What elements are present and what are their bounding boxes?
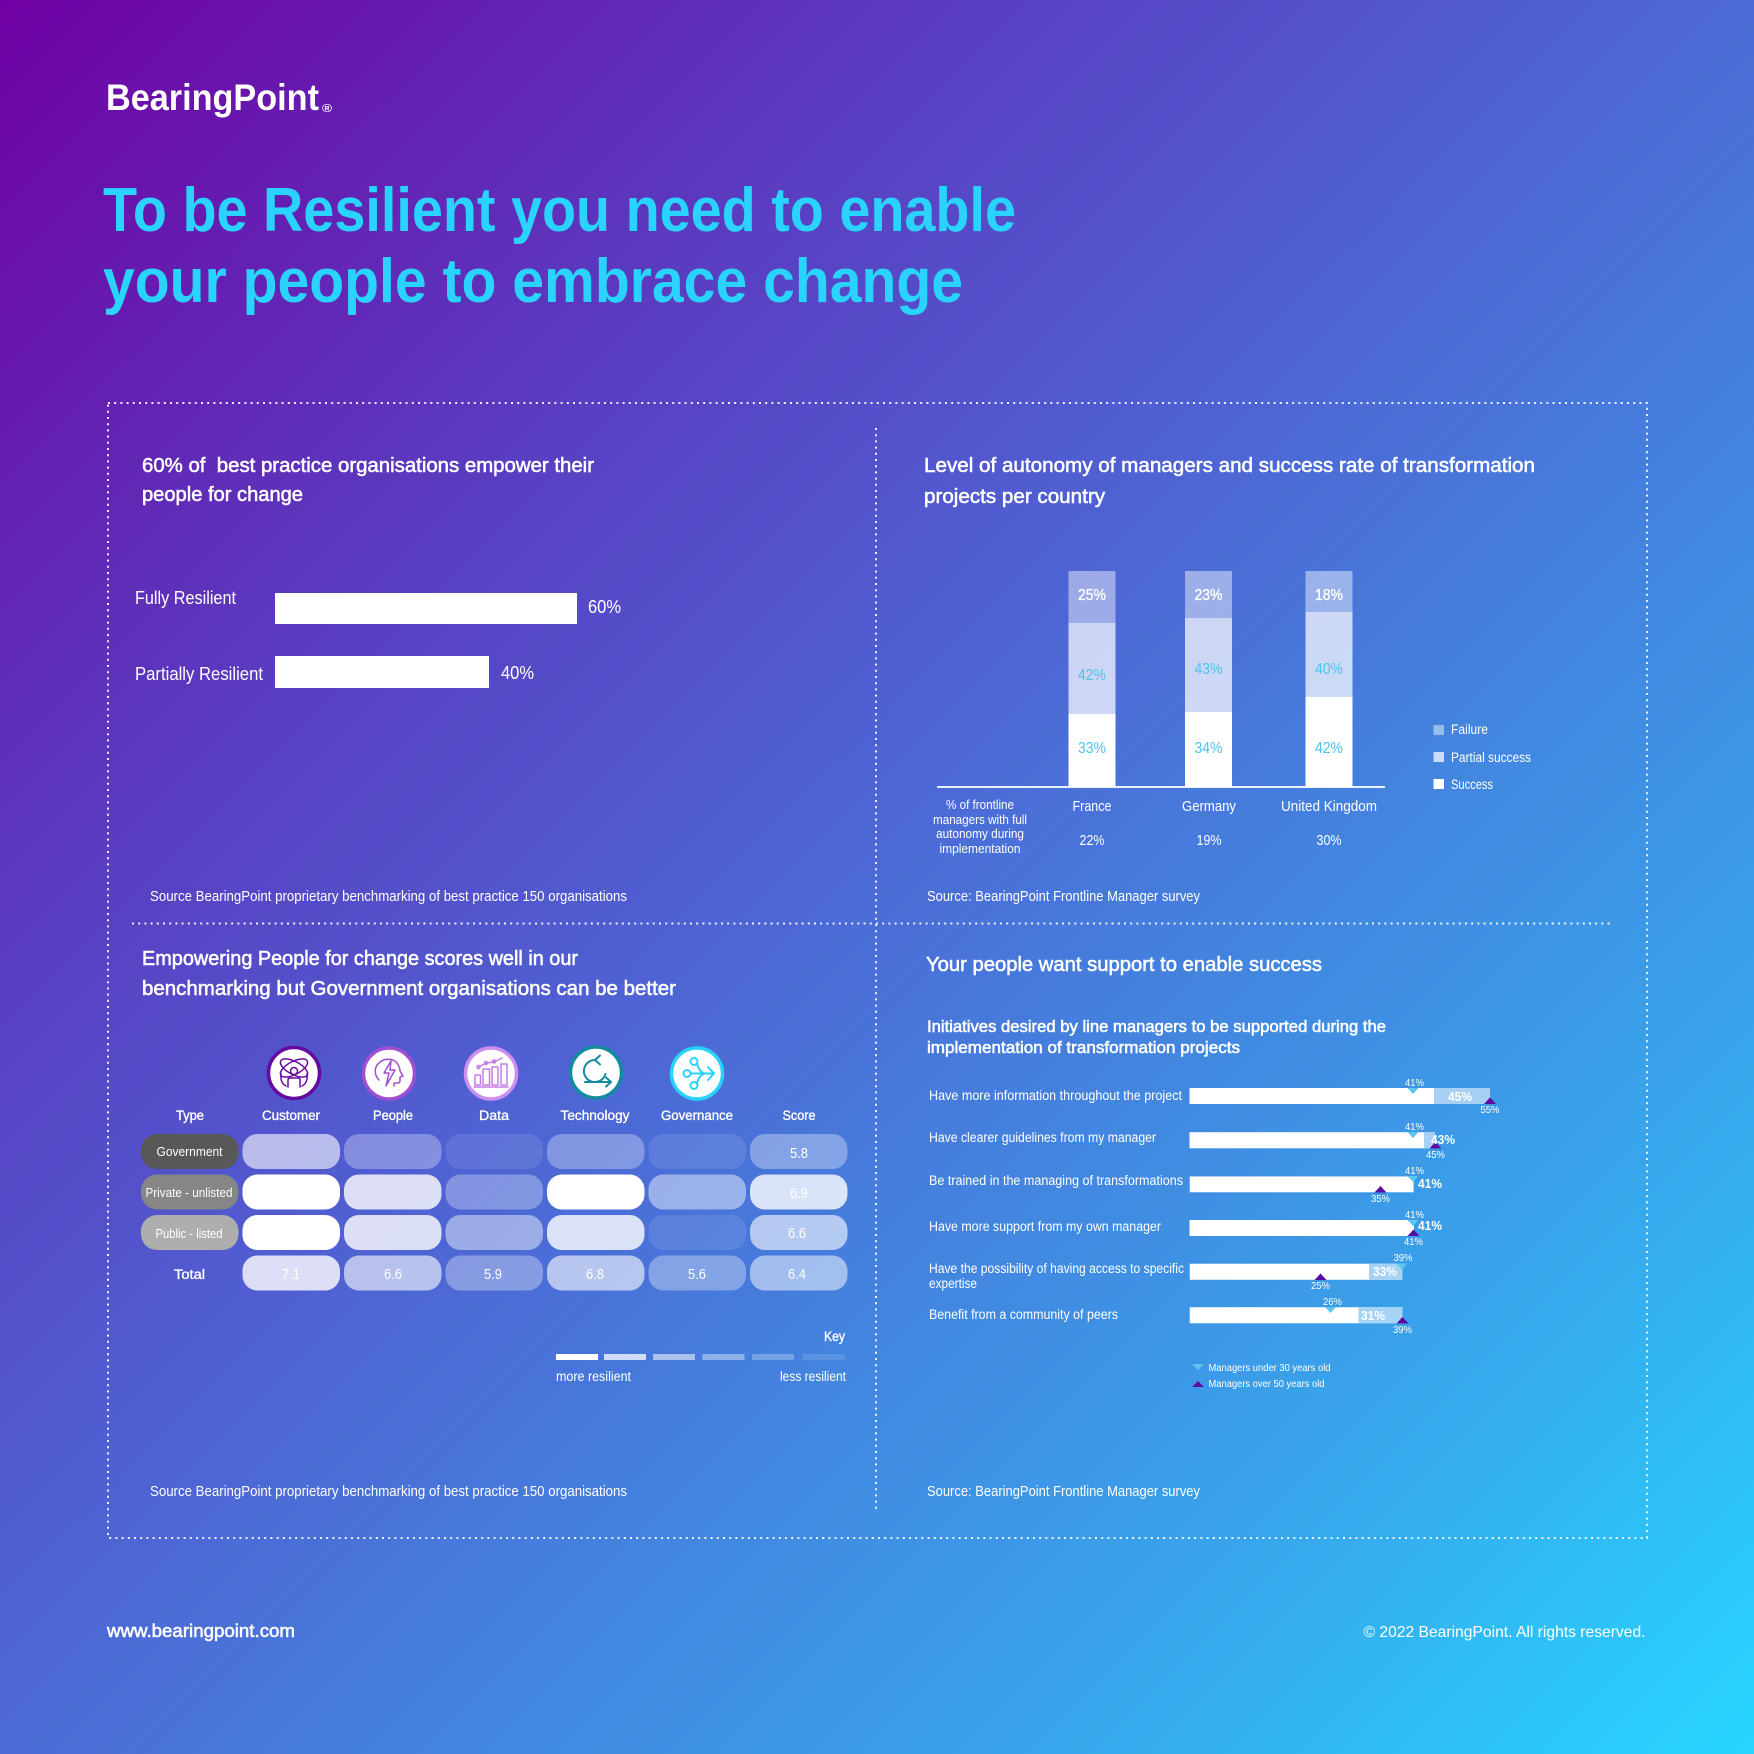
stacked bar chart <box>933 571 1385 856</box>
bar chart: initiatives: 55% <box>1480 1104 1500 1116</box>
legend: outcome <box>1434 722 1531 792</box>
bar chart: resilience: Fully Resilient <box>135 588 236 608</box>
heat table: 5.9 <box>484 1267 502 1283</box>
heat table <box>141 1134 848 1290</box>
bar chart: initiatives: Have clearer guidelines from my manager <box>929 1130 1156 1145</box>
heat table: 6.9 <box>790 1186 808 1202</box>
panel: autonomy and success rate <box>924 454 1535 905</box>
panel: benchmarking table <box>141 947 848 1500</box>
table header: Customer <box>262 1108 320 1123</box>
bar chart: initiatives: 39% <box>1394 1252 1412 1264</box>
heading <box>924 454 1535 508</box>
bar chart: initiatives: 41% <box>1405 1165 1424 1177</box>
logo: BearingPoint <box>106 77 319 118</box>
bar chart: initiatives <box>929 1077 1500 1336</box>
heat table: Public - listed <box>156 1227 223 1241</box>
bar chart: initiatives: 35% <box>1371 1193 1390 1205</box>
stacked bar chart: 30% <box>1316 833 1342 849</box>
stacked bar chart: 42% <box>1315 740 1343 757</box>
heat table: 6.6 <box>384 1267 402 1283</box>
icon: people <box>364 1048 414 1099</box>
table header: Type <box>176 1108 204 1123</box>
panel: best practice organisations <box>135 454 627 905</box>
table header: Governance <box>661 1108 733 1123</box>
bar chart: initiatives: 45% <box>1426 1149 1445 1161</box>
heat table: 6.8 <box>586 1267 604 1283</box>
bar chart: initiatives: Have more support from my own manager <box>929 1219 1161 1234</box>
panel: support for success <box>926 953 1500 1500</box>
heat table: Private - unlisted <box>146 1186 233 1200</box>
heat table: Government <box>156 1145 223 1159</box>
source note: Source BearingPoint proprietary benchmarking of best practice 150 organisations <box>150 889 627 905</box>
legend: manager age <box>1192 1362 1331 1390</box>
bar chart: initiatives: Have the possibility of having access to specific <box>929 1261 1184 1276</box>
stacked bar chart: 34% <box>1194 740 1223 757</box>
bar chart: initiatives: 43% <box>1431 1132 1455 1147</box>
bar chart: resilience <box>135 588 621 688</box>
bar chart: initiatives: 41% <box>1418 1218 1442 1233</box>
stacked bar chart: 19% <box>1196 833 1222 849</box>
bar chart: initiatives: Be trained in the managing of transformations <box>929 1173 1183 1188</box>
stacked bar chart: 43% <box>1194 661 1223 678</box>
heat table: 6.4 <box>788 1267 806 1283</box>
table header: People <box>373 1108 413 1123</box>
bar chart: initiatives: 26% <box>1323 1296 1342 1308</box>
stacked bar chart: United Kingdom <box>1281 799 1377 815</box>
bar chart: initiatives: 41% <box>1404 1236 1423 1248</box>
bar chart: initiatives: 41% <box>1405 1121 1424 1133</box>
bar chart: resilience: 40% <box>501 663 534 683</box>
heading: projects per country <box>924 485 1106 508</box>
bar chart: initiatives: 41% <box>1418 1176 1442 1191</box>
bar chart: initiatives: 41% <box>1405 1209 1424 1221</box>
bar chart: initiatives: Have more information throughout the project <box>929 1088 1182 1103</box>
legend: outcome: Partial success <box>1451 750 1531 765</box>
bar chart: resilience: 60% <box>588 597 621 617</box>
heading <box>142 947 676 1000</box>
heading: people for change <box>142 483 303 506</box>
bar chart: initiatives: 33% <box>1373 1264 1397 1279</box>
stacked bar chart: 18% <box>1315 587 1343 604</box>
stacked bar chart: 40% <box>1315 661 1343 678</box>
legend: outcome: Failure <box>1451 722 1488 737</box>
subheading <box>927 1018 1386 1057</box>
bar chart: initiatives: 31% <box>1361 1308 1385 1323</box>
table header: Score <box>782 1108 816 1123</box>
heat table: Total <box>174 1267 205 1282</box>
icon: technology <box>570 1047 622 1098</box>
key: less resilient <box>780 1369 846 1384</box>
footer: website: www.bearingpoint.com <box>106 1620 295 1641</box>
source note: Source: BearingPoint Frontline Manager survey <box>927 1484 1201 1500</box>
bar chart: initiatives: 39% <box>1393 1324 1412 1336</box>
stacked bar chart: 25% <box>1078 587 1106 604</box>
title: To be Resilient you need to enable <box>103 176 1016 245</box>
stacked bar chart: implementation <box>940 842 1021 856</box>
bar chart: initiatives: expertise <box>929 1276 977 1291</box>
heading: Your people want support to enable success <box>926 953 1322 976</box>
bar chart: initiatives: Benefit from a community of peers <box>929 1307 1118 1322</box>
bar chart: initiatives: 45% <box>1448 1089 1472 1104</box>
heat table: 5.8 <box>790 1146 808 1162</box>
stacked bar chart: France <box>1072 799 1112 815</box>
key <box>556 1329 846 1384</box>
table header: Technology <box>560 1108 630 1123</box>
key: Key <box>824 1329 845 1344</box>
icon: data <box>466 1048 516 1099</box>
stacked bar chart: autonomy during <box>936 827 1024 841</box>
table header: Data <box>479 1108 510 1123</box>
subheading: Initiatives desired by line managers to be supported during the <box>927 1018 1386 1036</box>
stacked bar chart: Germany <box>1182 799 1237 815</box>
heading: Level of autonomy of managers and success rate of transformation <box>924 454 1535 477</box>
heading: 60% of best practice organisations empower their <box>142 454 594 477</box>
table header <box>176 1108 816 1123</box>
bar chart: initiatives: 25% <box>1311 1280 1330 1292</box>
heading <box>142 454 594 506</box>
icon: governance <box>672 1048 722 1099</box>
footer: copyright: © 2022 BearingPoint. All rights reserved. <box>1364 1624 1646 1641</box>
legend: outcome: Success <box>1451 777 1493 792</box>
stacked bar chart: 33% <box>1078 740 1106 757</box>
heat table: 6.6 <box>788 1226 806 1242</box>
heading: benchmarking but Government organisations can be better <box>142 977 676 1000</box>
heat table: 7.1 <box>282 1267 300 1283</box>
source note: Source: BearingPoint Frontline Manager survey <box>927 889 1201 905</box>
heading: Empowering People for change scores well in our <box>142 947 578 970</box>
legend: manager age: Managers over 50 years old <box>1208 1378 1325 1390</box>
source note: Source BearingPoint proprietary benchmarking of best practice 150 organisations <box>150 1484 627 1500</box>
subheading: implementation of transformation projects <box>927 1039 1240 1057</box>
stacked bar chart: 22% <box>1080 833 1105 849</box>
heat table: 5.6 <box>688 1267 706 1283</box>
bar chart: resilience: Partially Resilient <box>135 664 263 684</box>
stacked bar chart: % of frontline <box>946 798 1014 812</box>
title: your people to embrace change <box>103 247 963 316</box>
icon: customer <box>268 1048 320 1098</box>
logo: ® <box>322 103 332 115</box>
stacked bar chart: managers with full <box>933 813 1027 827</box>
key: more resilient <box>556 1369 631 1384</box>
title <box>103 176 1016 316</box>
legend: manager age: Managers under 30 years old <box>1208 1362 1331 1374</box>
stacked bar chart: 42% <box>1078 667 1106 684</box>
stacked bar chart: 23% <box>1194 587 1223 604</box>
bar chart: initiatives: 41% <box>1405 1077 1424 1089</box>
